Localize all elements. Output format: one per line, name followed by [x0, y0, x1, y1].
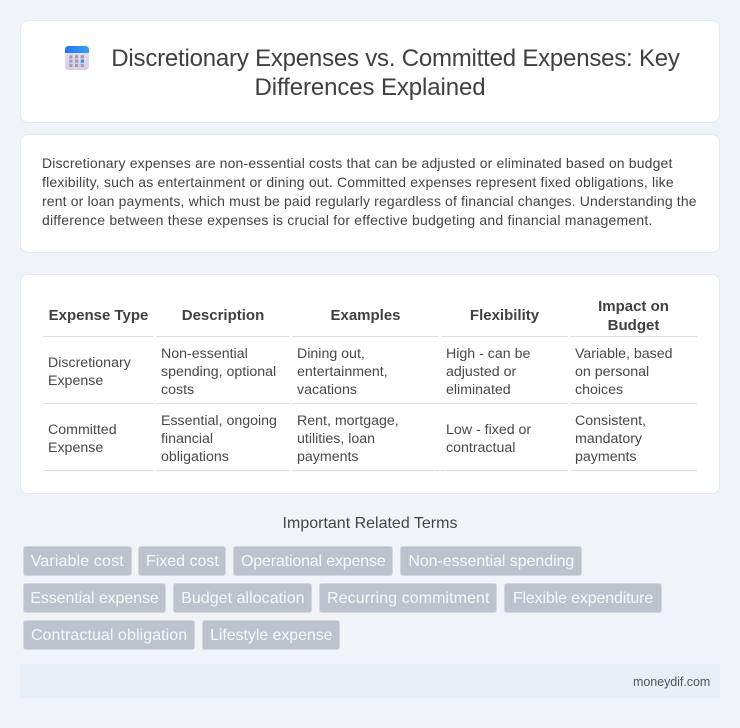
header row: Budget — [608, 317, 659, 334]
row: discretionary expense: vacations — [297, 382, 357, 398]
row: committed expense: contractual — [446, 440, 515, 456]
text block: description: rent or loan payments, which must be paid regularly regardless of financial changes. Understanding the — [42, 193, 697, 209]
tag — [202, 620, 340, 650]
tag — [504, 583, 662, 613]
row: committed expense: Low - fixed or — [446, 422, 531, 438]
header row: Examples — [330, 307, 401, 324]
tag — [23, 546, 132, 576]
tag: Non-essential spending — [408, 553, 574, 570]
panel: description card — [20, 134, 720, 253]
row: committed expense: mandatory — [575, 431, 642, 447]
row: discretionary expense: adjusted or — [446, 364, 516, 380]
comparison table — [43, 298, 697, 471]
title: Discretionary Expenses vs. Committed Expenses: Key — [111, 45, 680, 72]
row: discretionary expense: on personal — [575, 364, 649, 380]
row: discretionary expense: eliminated — [446, 382, 511, 398]
header row: Expense Type — [49, 307, 148, 324]
footer credit: moneydif.com — [633, 675, 710, 689]
tag — [319, 583, 497, 613]
tag — [23, 583, 166, 613]
tag: Recurring commitment — [327, 590, 490, 607]
row: committed expense — [48, 413, 646, 465]
row: discretionary expense: choices — [575, 382, 623, 398]
row: discretionary expense — [48, 346, 673, 398]
tag: Contractual obligation — [31, 627, 187, 644]
tag — [23, 620, 195, 650]
title: Differences Explained — [255, 74, 485, 101]
text block: description: flexibility, such as entertainment or dining out. Committed expenses represent fixed obligations, like — [42, 174, 674, 190]
tag: Fixed cost — [146, 553, 219, 570]
text block: description: difference between these expenses is crucial for effective budgeting and financial management. — [42, 212, 653, 228]
tag: Budget allocation — [181, 590, 305, 607]
row: committed expense: utilities, loan — [297, 431, 375, 447]
row: discretionary expense: costs — [161, 382, 194, 398]
text block: description: Discretionary expenses are non-essential costs that can be adjusted or eliminated based on budget — [42, 155, 673, 171]
row: committed expense: Essential, ongoing — [161, 413, 277, 429]
panel: comparison table card — [20, 274, 720, 494]
text block: description — [42, 155, 697, 228]
tag: Essential expense — [30, 590, 159, 607]
row: discretionary expense: Expense — [48, 373, 103, 389]
footer bar — [20, 664, 720, 698]
row: committed expense: obligations — [161, 449, 229, 465]
header row: Impact on — [598, 298, 669, 315]
row: committed expense: Rent, mortgage, — [297, 413, 399, 429]
panel: title card — [20, 20, 720, 123]
row: committed expense: Expense — [48, 440, 103, 456]
tag — [173, 583, 312, 613]
tag: Lifestyle expense — [210, 627, 333, 644]
row: discretionary expense: Non-essential — [161, 346, 248, 362]
tag: Flexible expenditure — [513, 590, 653, 607]
tag — [233, 546, 393, 576]
row: discretionary expense: Dining out, — [297, 346, 365, 362]
row: committed expense: Committed — [48, 422, 117, 438]
row: discretionary expense: High - can be — [446, 346, 530, 362]
row: discretionary expense: Discretionary — [48, 355, 131, 371]
tag group: related terms — [23, 546, 662, 650]
heading: important related terms: Important Related Terms — [283, 515, 457, 532]
row: discretionary expense: entertainment, — [297, 364, 388, 380]
icon: calendar — [65, 46, 89, 70]
row: committed expense: financial — [161, 431, 213, 447]
row: committed expense: payments — [575, 449, 637, 465]
tag: Variable cost — [31, 553, 124, 570]
tag: Operational expense — [241, 553, 386, 570]
title — [111, 45, 680, 101]
tag — [138, 546, 226, 576]
header row: Flexibility — [470, 307, 539, 324]
header row: Description — [182, 307, 264, 324]
row: committed expense: Consistent, — [575, 413, 646, 429]
tag — [400, 546, 582, 576]
row: discretionary expense: spending, optional — [161, 364, 276, 380]
row: committed expense: payments — [297, 449, 359, 465]
header row — [49, 298, 669, 334]
row: discretionary expense: Variable, based — [575, 346, 673, 362]
